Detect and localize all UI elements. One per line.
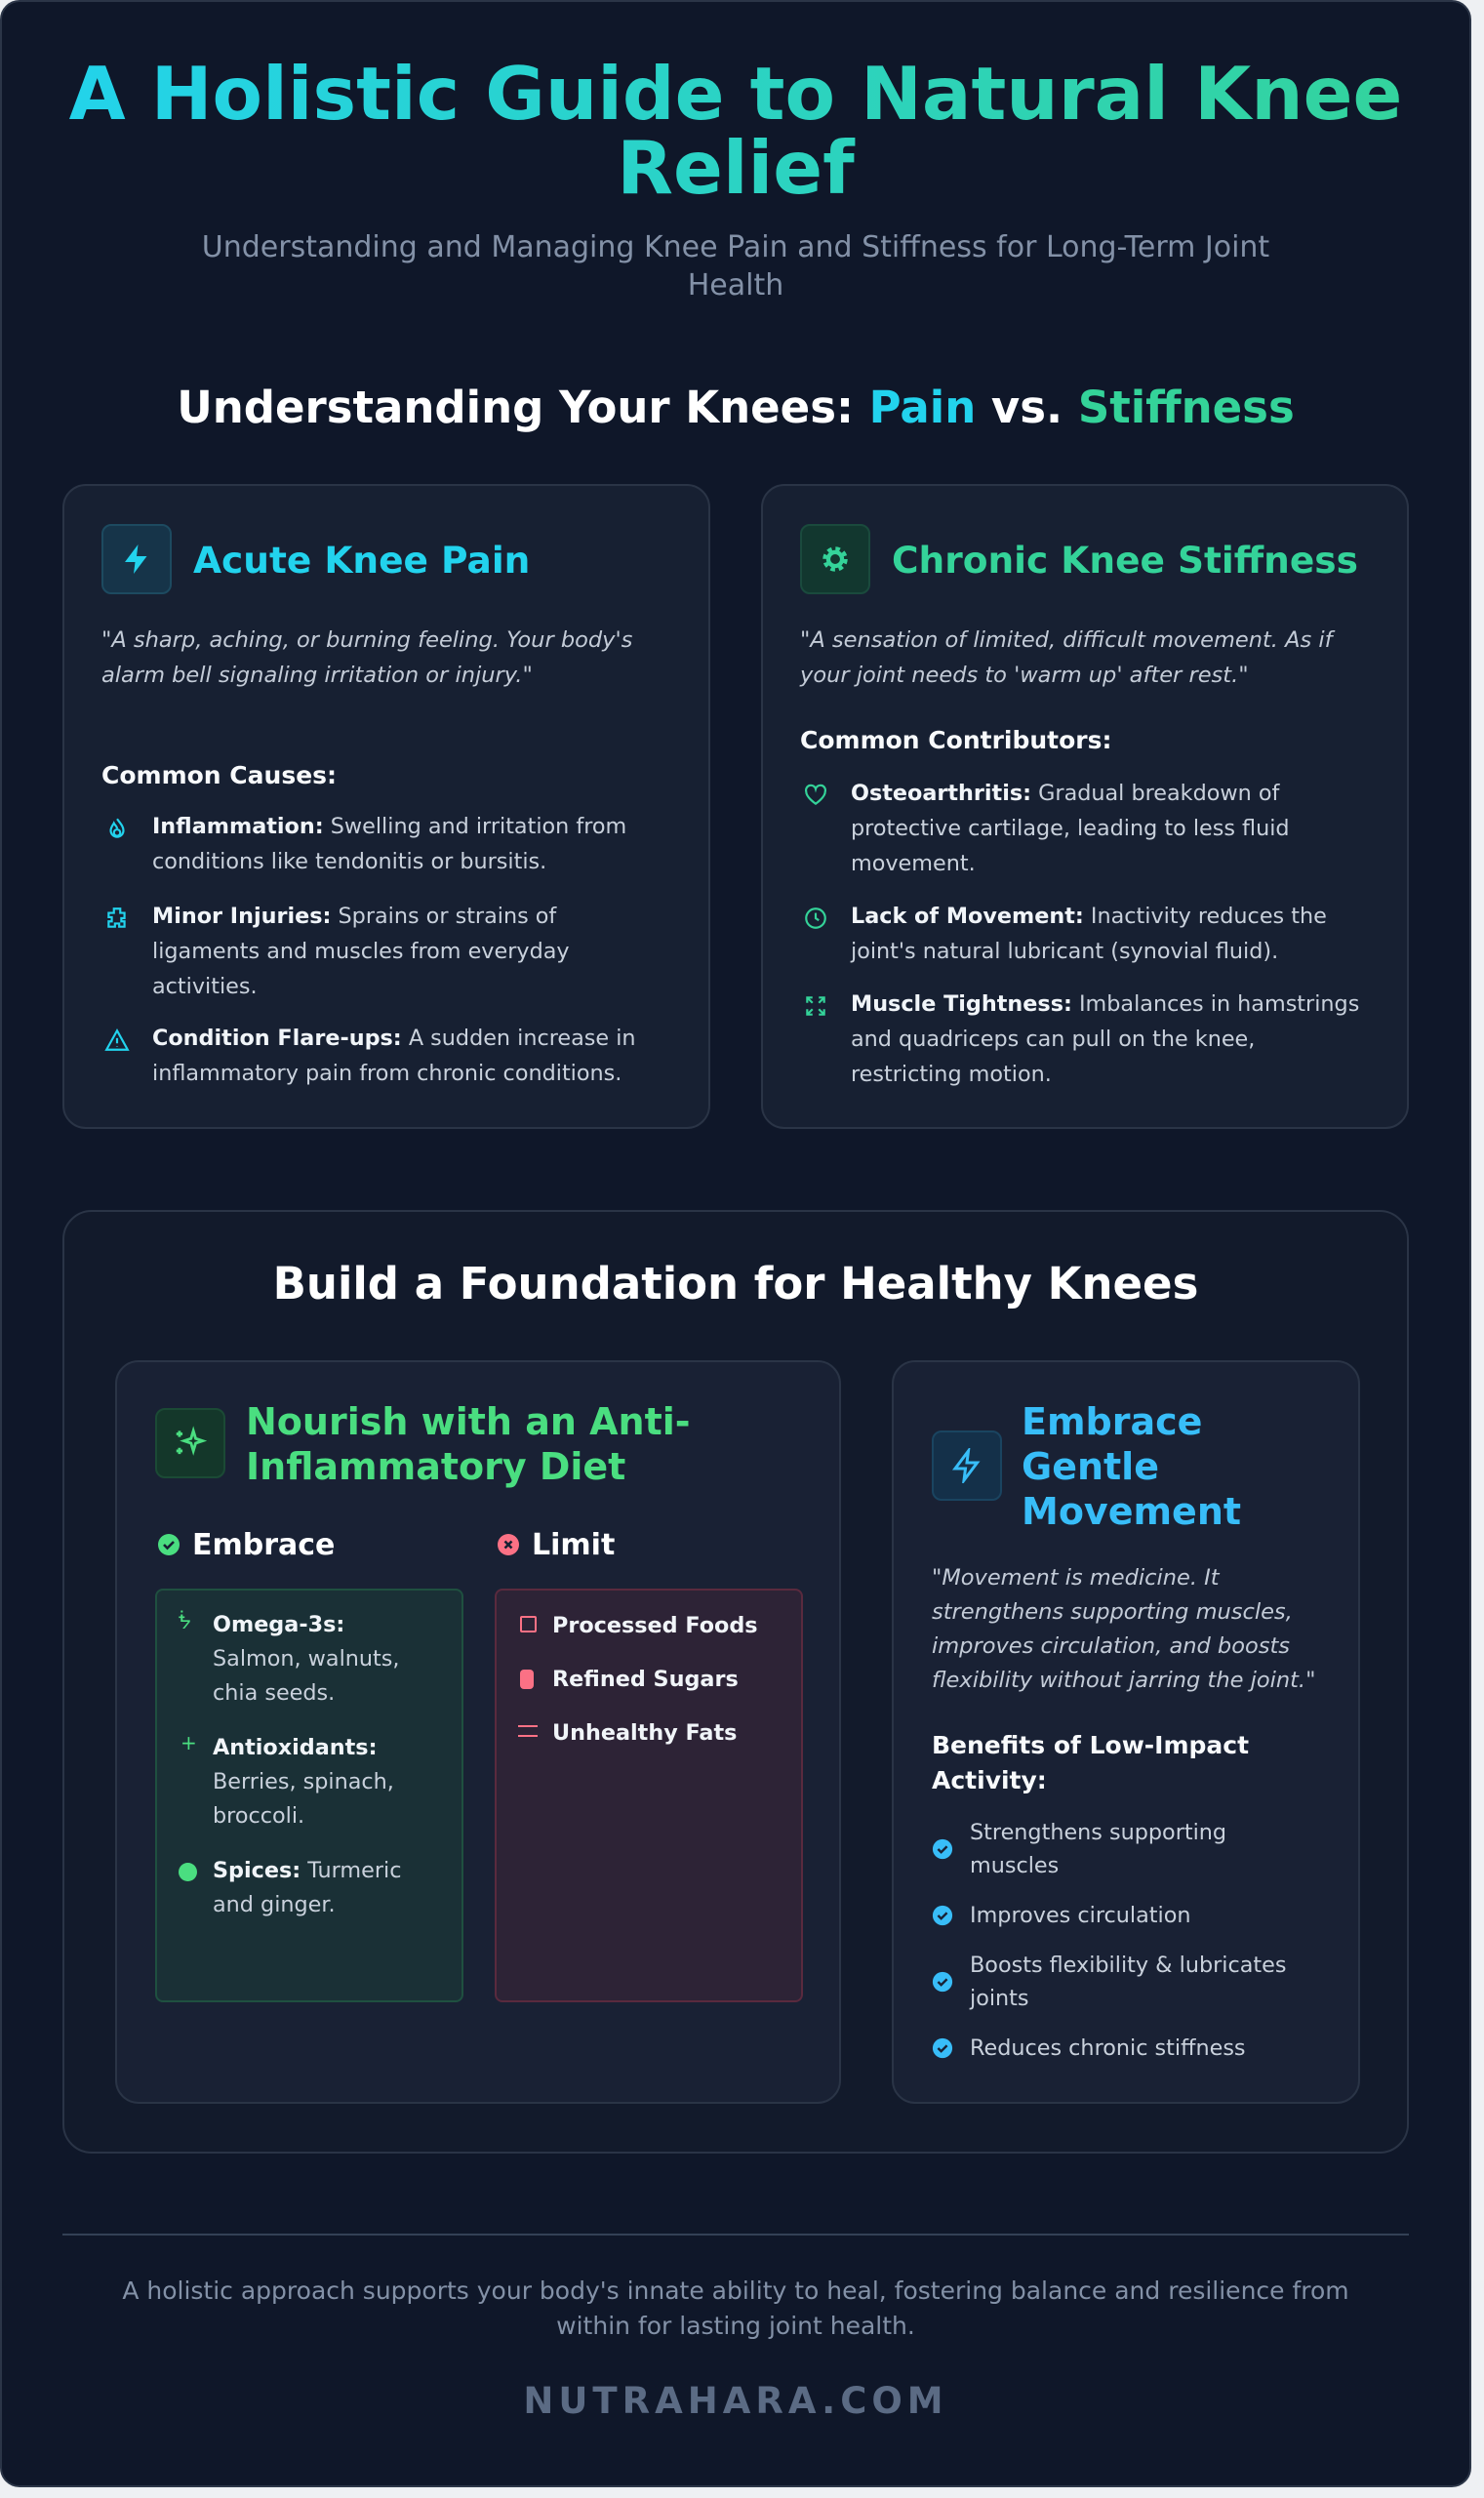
- quote: "A sharp, aching, or burning feeling. Your body's: [101, 627, 632, 653]
- subheading: [932, 1731, 1249, 1794]
- heading: Chronic Knee Stiffness: [892, 539, 1358, 582]
- item: omega-3s: [179, 1610, 399, 1706]
- list: contributors: [805, 781, 1359, 1087]
- list: benefits: muscles: [970, 1853, 1059, 1878]
- item: inflammation: [109, 814, 626, 874]
- heading: Inflammatory Diet: [246, 1445, 625, 1488]
- embrace heading: Embrace: [192, 1528, 335, 1562]
- section heading: pain vs stiffness: Understanding Your Knees: Pain vs. Stiffness: [177, 382, 1295, 433]
- embrace box: and ginger.: [213, 1892, 336, 1917]
- embrace box: broccoli.: [213, 1803, 304, 1829]
- subheading: Activity:: [932, 1766, 1047, 1794]
- item: processed foods: Processed Foods: [552, 1613, 758, 1638]
- list: benefits: joints: [970, 1986, 1029, 2011]
- heading: [246, 1400, 691, 1488]
- quote: flexibility without jarring the joint.": [932, 1668, 1315, 1693]
- benefit 1: [933, 1820, 1226, 1878]
- embrace box: [155, 1589, 463, 2002]
- list: contributors: Lack of Movement: Inactivity reduces the: [851, 904, 1327, 929]
- list: causes: inflammatory pain from chronic conditions.: [152, 1061, 622, 1086]
- icon: lightning: [101, 524, 172, 594]
- list: causes: ligaments and muscles from everyday: [152, 939, 570, 964]
- quote: "Movement is medicine. It: [932, 1565, 1220, 1591]
- quote: [932, 1565, 1315, 1693]
- panel: acute knee pain: [62, 484, 710, 1129]
- embrace box: Antioxidants:: [213, 1735, 378, 1760]
- limit column: [495, 1528, 803, 2002]
- heading: Nourish with an Anti-: [246, 1400, 691, 1443]
- list: contributors: Osteoarthritis: Gradual breakdown of: [851, 781, 1279, 806]
- list: causes: Minor Injuries: Sprains or strains of: [152, 904, 556, 929]
- item: refined sugars: Refined Sugars: [552, 1667, 739, 1692]
- list: benefits: Strengthens supporting: [970, 1820, 1226, 1845]
- embrace box: Berries, spinach,: [213, 1769, 394, 1794]
- benefit 4: [933, 2035, 1246, 2061]
- quote: strengthens supporting muscles,: [932, 1599, 1293, 1625]
- list: contributors: restricting motion.: [851, 1062, 1052, 1087]
- benefit 2: [933, 1903, 1190, 1928]
- title: Relief: [617, 125, 855, 211]
- subtitle: Health: [688, 268, 783, 302]
- quote: [101, 627, 632, 688]
- list: contributors: Muscle Tightness: Imbalances in hamstrings: [851, 991, 1359, 1017]
- embrace box: ᖭ: [179, 1610, 191, 1633]
- heading: Acute Knee Pain: [193, 539, 530, 582]
- limit heading: Limit: [532, 1528, 615, 1562]
- icon: gear: [800, 524, 870, 594]
- brand: NUTRAHARA.COM: [523, 2380, 948, 2422]
- heading: Build a Foundation for Healthy Knees: [273, 1258, 1198, 1309]
- quote: alarm bell signaling irritation or injury.": [101, 663, 533, 688]
- list: contributors: joint's natural lubricant (synovial fluid).: [851, 939, 1278, 964]
- embrace box: Omega-3s:: [213, 1612, 344, 1637]
- panel: movement: [892, 1360, 1360, 2104]
- embrace column: [155, 1528, 463, 2002]
- subheading: Benefits of Low-Impact: [932, 1731, 1249, 1759]
- footer text: [122, 2276, 1349, 2340]
- list: causes: Condition Flare-ups: A sudden increase in: [152, 1026, 636, 1051]
- title: [0, 57, 1471, 205]
- list: causes: Inflammation: Swelling and irritation from: [152, 814, 626, 839]
- list: contributors: protective cartilage, leading to less fluid: [851, 816, 1290, 841]
- embrace box: Spices: Turmeric: [213, 1858, 402, 1883]
- heading: Embrace: [1022, 1400, 1202, 1443]
- list: contributors: movement.: [851, 851, 976, 876]
- list: contributors: and quadriceps can pull on the knee,: [851, 1027, 1255, 1052]
- benefit 3: [933, 1953, 1286, 2011]
- item: antioxidants: [180, 1731, 394, 1829]
- item: minor injuries: [107, 904, 570, 999]
- heading: [1022, 1400, 1241, 1533]
- item: lack of movement: [805, 904, 1327, 964]
- panel: chronic knee stiffness: [761, 484, 1409, 1129]
- subheading: Common Causes:: [101, 761, 337, 789]
- list: causes: [104, 814, 636, 1086]
- list: causes: conditions like tendonitis or bursitis.: [152, 849, 546, 874]
- list: benefits: Improves circulation: [970, 1903, 1190, 1928]
- quote: "A sensation of limited, difficult movement. As if: [800, 627, 1333, 653]
- heading: Gentle: [1022, 1445, 1159, 1488]
- list: causes: activities.: [152, 974, 258, 999]
- list: benefits: Boosts flexibility & lubricates: [970, 1953, 1286, 1978]
- item: flare-ups: [104, 1026, 636, 1086]
- embrace box: Salmon, walnuts,: [213, 1646, 399, 1672]
- heading: Movement: [1022, 1490, 1241, 1533]
- quote: improves circulation, and boosts: [932, 1633, 1290, 1659]
- item: muscle tightness: [806, 991, 1359, 1087]
- quote: your joint needs to 'warm up' after rest.": [800, 663, 1249, 688]
- panel: diet: [115, 1360, 841, 2104]
- embrace box: +: [180, 1731, 197, 1754]
- item: unhealthy fats: Unhealthy Fats: [552, 1720, 737, 1746]
- embrace box: chia seeds.: [213, 1680, 335, 1706]
- item: spices: [179, 1858, 402, 1917]
- item: osteoarthritis: [805, 781, 1290, 876]
- list: benefits: Reduces chronic stiffness: [970, 2035, 1246, 2061]
- subtitle: Understanding and Managing Knee Pain and Stiffness for Long-Term Joint: [202, 230, 1269, 264]
- footer text: A holistic approach supports your body's innate ability to heal, fostering balance and resilience from: [122, 2276, 1349, 2305]
- list: benefits: [933, 1820, 1286, 2061]
- quote: [800, 627, 1335, 688]
- icon: sparkles: [155, 1408, 225, 1478]
- footer text: within for lasting joint health.: [556, 2312, 915, 2340]
- subtitle: [202, 230, 1269, 302]
- title: A Holistic Guide to Natural Knee: [69, 51, 1402, 137]
- limit box: [495, 1589, 803, 2002]
- panel: build a foundation: [62, 1210, 1409, 2154]
- subheading: Common Contributors:: [800, 726, 1112, 754]
- icon: bolt outline: [932, 1430, 1002, 1501]
